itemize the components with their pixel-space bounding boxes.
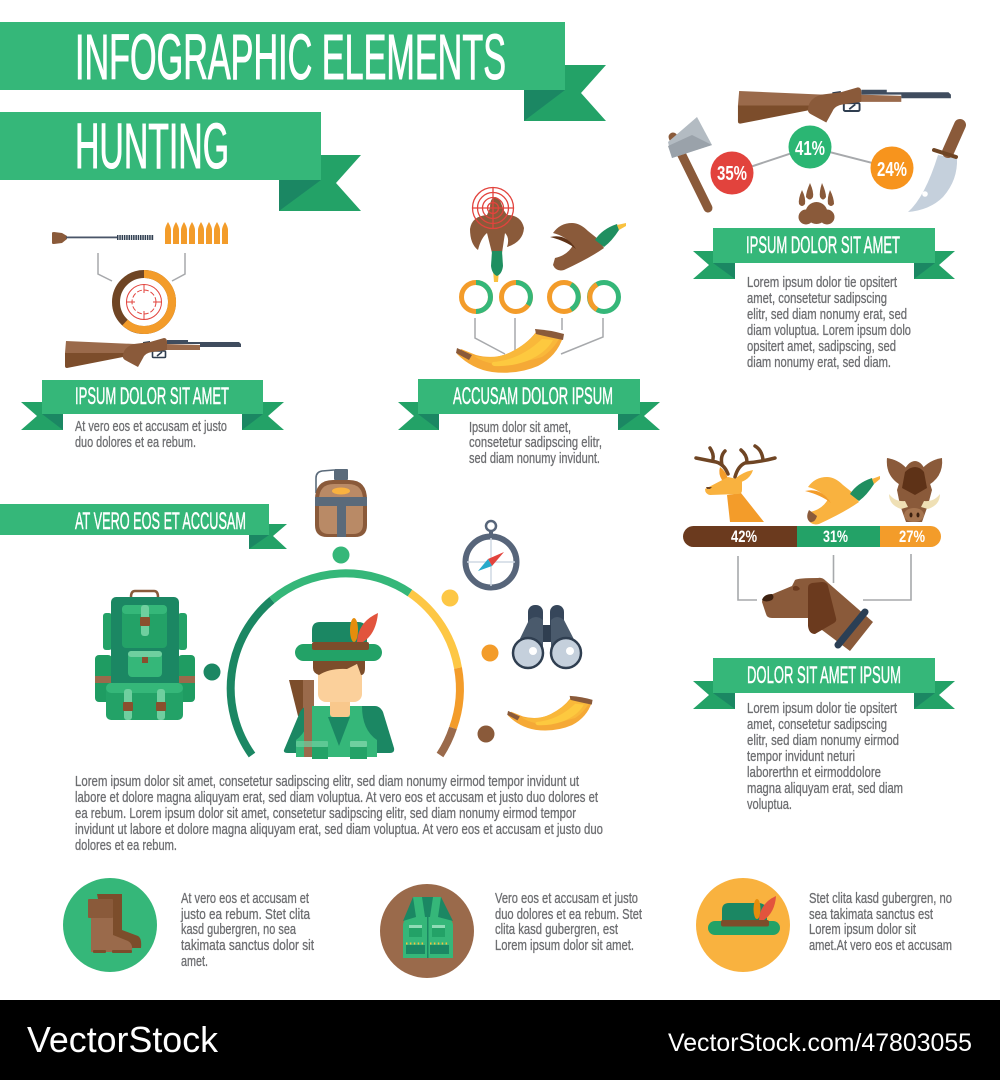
icon: diving duck: [470, 197, 524, 282]
donut charts: [462, 282, 618, 312]
text block: vest: [495, 890, 643, 954]
text block: duck caption: [469, 419, 602, 467]
text block: vest: clita kasd gubergren, est: [495, 921, 619, 938]
icon: flask: [315, 469, 367, 537]
icon: target reticle: [472, 187, 514, 229]
banner: at vero eos et accusam: [0, 504, 287, 549]
text block: vest: duo dolores et ea rebum. Stet: [495, 906, 643, 923]
stat: 41%: [788, 126, 832, 168]
panel: game statistics: [683, 446, 942, 651]
stat: 24%: [870, 146, 914, 190]
text block: game caption: [747, 700, 903, 813]
banner: at vero eos et accusam: AT VERO EOS ET ACCUSAM: [75, 508, 246, 535]
icon: binoculars: [513, 605, 581, 668]
text block: left caption: duo dolores et ea rebum.: [75, 434, 196, 451]
banner: ipsum dolor sit amet (right): [693, 228, 955, 279]
ring dots: [204, 546, 498, 742]
ring arc segments: [231, 573, 460, 755]
icon: boots in green circle: [63, 878, 157, 972]
icon: flying duck: [550, 223, 626, 270]
icon: bear paw: [798, 183, 834, 224]
icon: hat in yellow circle: [696, 878, 790, 972]
text block: duck caption: Ipsum dolor sit amet,: [469, 419, 571, 436]
stat: 35%: 35%: [717, 163, 747, 185]
banner: dolor sit amet ipsum: [693, 658, 955, 709]
icon: compass: [466, 521, 516, 588]
icon: rifle: [738, 87, 951, 124]
text block: vest: Lorem ipsum dolor sit amet.: [495, 937, 634, 954]
text block: duck caption: sed diam nonumy invidunt.: [469, 450, 600, 467]
text block: game caption: laborerthn et eirmoddolore: [747, 764, 881, 781]
text block: weapons caption: amet, consetetur sadipscing: [747, 290, 887, 307]
text block: game caption: magna aliquyam erat, sed diam: [747, 780, 903, 797]
text block: boots: takimata sanctus dolor sit: [181, 937, 315, 954]
icon: yellow duck: [805, 476, 880, 524]
stacked bar chart: [683, 526, 941, 547]
icon: dog head: [762, 578, 873, 651]
icon: backpack: [95, 591, 195, 720]
connector lines: [738, 554, 911, 600]
text block: left caption: At vero eos et accusam et justo: [75, 418, 227, 435]
text block: main paragraph: invidunt ut labore et dolore magna aliquyam erat, sed diam voluptua. At vero eos et accusam et justo duo: [75, 821, 603, 838]
icon: axe: [668, 117, 712, 208]
text block: boots: amet.: [181, 953, 208, 970]
footer bar: VectorStock: [27, 1019, 219, 1060]
connector lines: [98, 253, 185, 281]
panel: weapons statistics: [668, 87, 960, 224]
text block: weapons caption: diam voluptua. Lorem ipsum dolo: [747, 322, 911, 339]
donut chart: target: [116, 274, 172, 330]
text block: weapons caption: [747, 274, 911, 371]
banner: ipsum dolor sit amet (left): [21, 380, 284, 430]
icon: hunting horn: [456, 329, 564, 373]
icon: hunter: [284, 613, 394, 759]
banner: accusam dolor ipsum: [398, 379, 660, 430]
stacked bar chart: 31%: [823, 527, 848, 546]
icon: bullets: [165, 222, 228, 244]
icon: rifle: [65, 338, 241, 368]
icon: deer: [696, 446, 775, 522]
text block: main paragraph: [75, 773, 603, 854]
text block: boots: justo ea rebum. Stet clita: [180, 906, 311, 923]
text block: hat: sea takimata sanctus est: [809, 906, 934, 923]
connector lines: [732, 147, 892, 173]
text block: game caption: elitr, sed diam nonumy eirmod: [747, 732, 899, 749]
text block: game caption: voluptua.: [747, 796, 792, 813]
stat: 35%: [710, 152, 754, 194]
text block: hat: Stet clita kasd gubergren, no: [809, 890, 952, 907]
footer bar: [0, 1000, 1000, 1080]
text block: boots: At vero eos et accusam et: [181, 890, 310, 907]
title banner: hunting: HUNTING: [75, 110, 229, 182]
connector lines: [475, 318, 603, 354]
text block: boots: kasd gubergren, no sea: [181, 921, 296, 938]
text block: weapons caption: opsitert amet, sadipscing, sed: [747, 338, 896, 355]
stacked bar chart: 27%: [899, 527, 925, 546]
text block: game caption: tempor invidunt neturi: [747, 748, 855, 765]
panel: rifle maintenance: [52, 222, 241, 368]
stacked bar chart: 42%: [731, 527, 757, 546]
banner: ipsum dolor sit amet (left): IPSUM DOLOR SIT AMET: [75, 383, 229, 410]
title banner: infographic elements: [0, 21, 606, 121]
stat: 41%: 41%: [795, 138, 825, 160]
text block: duck caption: consetetur sadipscing elitr,: [469, 434, 602, 451]
text block: weapons caption: diam nonumy erat, sed diam.: [747, 354, 891, 371]
text block: boots: [180, 890, 315, 970]
stat: 24%: 24%: [877, 159, 907, 181]
panel: duck hunting: [456, 187, 626, 373]
icon: hunting horn: [507, 696, 593, 730]
text block: weapons caption: elitr, sed diam nonumy erat, sed: [747, 306, 907, 323]
text block: game caption: amet, consetetur sadipscing: [747, 716, 887, 733]
text block: main paragraph: dolores et ea rebum.: [75, 837, 177, 854]
text block: hat: Lorem ipsum dolor sit: [809, 921, 917, 938]
footer bar: VectorStock.com/47803055: [668, 1029, 972, 1057]
text block: game caption: Lorem ipsum dolor tie opsitert: [747, 700, 898, 717]
text block: left caption: [75, 418, 227, 451]
text block: main paragraph: Lorem ipsum dolor sit amet, consetetur sadipscing elitr, sed diam nonumy eirmod tempor invidunt ut: [75, 773, 580, 790]
icon: knife: [908, 125, 960, 212]
text block: weapons caption: Lorem ipsum dolor tie opsitert: [747, 274, 898, 291]
text block: main paragraph: ea rebum. Lorem ipsum dolor sit amet, consetetur sadipscing elitr, sed diam nonumy eirmod tempor: [75, 805, 576, 822]
title banner: infographic elements: INFOGRAPHIC ELEMENTS: [75, 21, 506, 93]
icon: boar: [887, 458, 942, 522]
text block: vest: Vero eos et accusam et justo: [495, 890, 638, 907]
icon: cleaning rod: [52, 232, 154, 244]
icon: vest in brown circle: [380, 884, 474, 978]
text block: hat: amet.At vero eos et accusam: [809, 937, 952, 954]
panel: hunter equipment: [95, 469, 593, 759]
text block: main paragraph: labore et dolore magna aliquyam erat, sed diam voluptua. At vero eos et accusam et justo duo dolores et: [75, 789, 599, 806]
title banner: hunting: [0, 110, 361, 211]
text block: hat: [809, 890, 952, 954]
banner: accusam dolor ipsum: ACCUSAM DOLOR IPSUM: [453, 383, 613, 410]
